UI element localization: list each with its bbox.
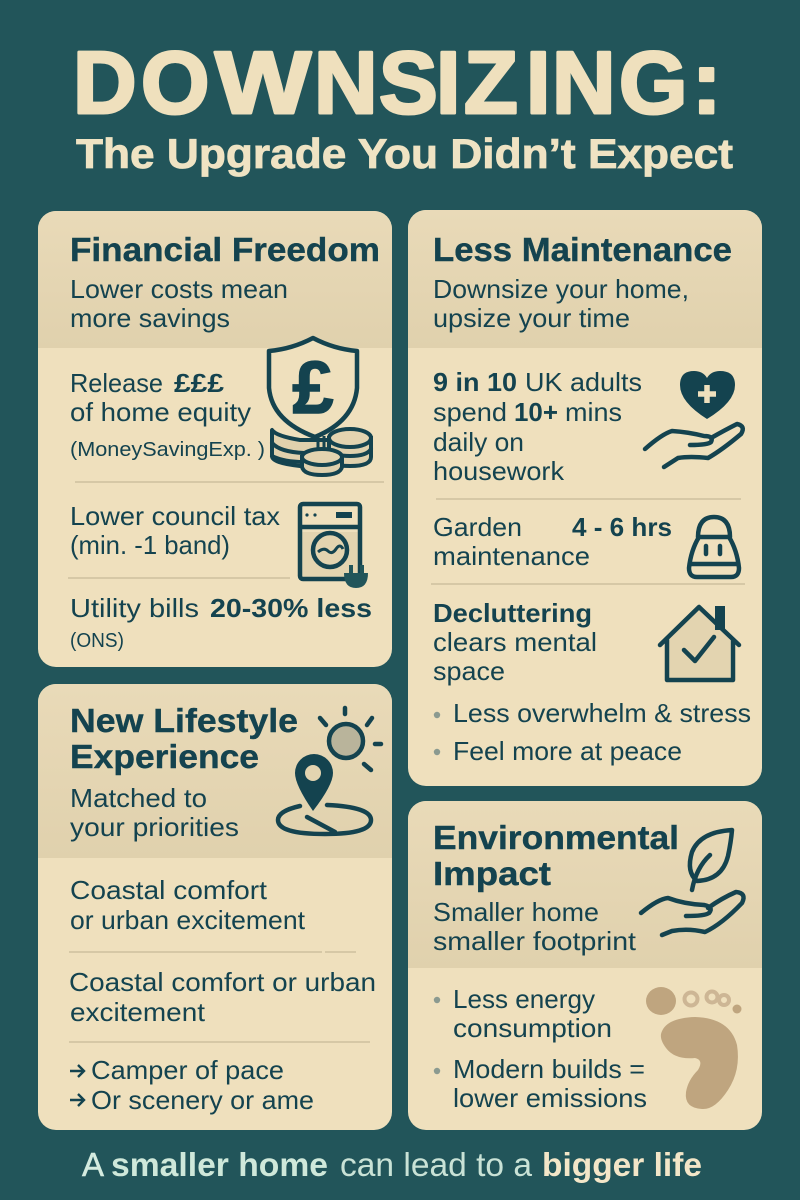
text: housework: spend (433, 397, 507, 427)
icon: shield with pound and coins: £ (292, 346, 334, 429)
title: DO (73, 33, 209, 132)
panel: financial freedom (38, 211, 392, 667)
text: home equity (70, 368, 265, 461)
subheading: your priorities (70, 812, 239, 842)
heading: financial freedom: Financial Freedom (70, 231, 380, 268)
arrow list: Or scenery or ame (91, 1085, 314, 1115)
text: utility bills: 20-30% less (210, 593, 372, 623)
bullet list: environmental: lower emissions (453, 1083, 647, 1113)
bullet list: environmental (434, 984, 647, 1113)
text: housework: 9 in 10 (433, 367, 517, 397)
subheading line 2: more savings (70, 303, 230, 333)
subheading: Smaller home (433, 897, 599, 927)
text: council tax: Lower council tax (70, 501, 280, 531)
panel: less maintenance (408, 210, 762, 786)
text: council tax (70, 501, 280, 560)
subheading: Matched to (70, 783, 207, 813)
footer tagline: bigger life (542, 1146, 702, 1183)
text: garden maintenance: maintenance (433, 541, 590, 571)
icon: bag (689, 517, 739, 577)
subheading: smaller footprint (433, 926, 637, 956)
text: decluttering: Decluttering (433, 598, 592, 628)
icon: sun and map pin (278, 708, 381, 834)
text: coastal comfort or urban: Coastal comfort or urban (69, 967, 376, 997)
text: home equity: (MoneySavingExp. ) (70, 439, 265, 461)
icon: heart in hand (645, 371, 743, 467)
text: council tax: (min. -1 band) (70, 530, 230, 560)
text: housework: mins (565, 397, 622, 427)
subheading line 2: upsize your time (433, 303, 630, 333)
icon: house with check (660, 606, 739, 680)
bullet list (434, 698, 751, 766)
subtitle: The Upgrade You Didn’t Expect (76, 130, 733, 177)
footer tagline: smaller home (111, 1146, 328, 1183)
text: utility bills: Utility bills (70, 593, 199, 623)
text: coastal comfort (70, 875, 306, 935)
bullet list: environmental: Modern builds = (453, 1054, 645, 1084)
subheading (433, 897, 637, 956)
title (73, 33, 721, 132)
text: coastal comfort: Coastal comfort (70, 875, 268, 905)
heading: new lifestyle experience: Experience (70, 738, 259, 775)
heading: new lifestyle experience (70, 702, 298, 775)
subheading (70, 783, 239, 842)
text: decluttering: clears mental (433, 627, 597, 657)
text: utility bills: (ONS) (70, 630, 124, 652)
bullet list: environmental: Less energy (453, 984, 595, 1014)
icon: leaf in hand (641, 830, 744, 935)
icon: shield with pound and coins (269, 338, 371, 475)
footer tagline: can lead to a (340, 1146, 533, 1183)
text: utility bills (70, 593, 372, 652)
text: home equity: Release (70, 368, 163, 398)
text: decluttering (433, 598, 597, 686)
text: garden maintenance: 4 - 6 hrs (572, 512, 672, 542)
text: garden maintenance: Garden (433, 512, 522, 542)
subheading: Lower costs mean (70, 274, 288, 304)
title: W (215, 33, 311, 132)
text: coastal comfort or urban: excitement (70, 997, 206, 1027)
text: coastal comfort: or urban excitement (70, 905, 306, 935)
text: housework: UK adults (525, 367, 642, 397)
heading: environmental impact (433, 819, 679, 892)
arrow list (70, 1055, 314, 1115)
bullet list: Feel more at peace (453, 736, 682, 766)
heading: environmental impact: Environmental (433, 819, 679, 856)
bullet list: Less overwhelm & stress (453, 698, 751, 728)
bullet list: environmental: consumption (453, 1013, 612, 1043)
text: decluttering: space (433, 656, 505, 686)
icon: footprint (646, 987, 742, 1109)
text: housework (433, 367, 642, 486)
footer tagline (82, 1146, 702, 1183)
text: home equity: £££ (174, 368, 225, 398)
text: housework: housework (433, 456, 565, 486)
text: coastal comfort or urban (69, 967, 376, 1027)
panel: new lifestyle experience (38, 684, 392, 1130)
heading: less maintenance: Less Maintenance (433, 231, 732, 268)
heading: environmental impact: Impact (433, 855, 551, 892)
icon: washing machine with plug (300, 504, 368, 588)
arrow list: Camper of pace (91, 1055, 284, 1085)
text: housework: daily on (433, 427, 524, 457)
title: NSIZING: (314, 33, 721, 132)
text: housework: 10+ (514, 397, 558, 427)
text: garden maintenance (433, 512, 672, 571)
footer tagline: A (82, 1146, 104, 1183)
subheading: Downsize your home, (433, 274, 689, 304)
panel: environmental impact (408, 801, 762, 1130)
text: home equity: of home equity (70, 397, 251, 427)
heading: new lifestyle experience: New Lifestyle (70, 702, 298, 739)
